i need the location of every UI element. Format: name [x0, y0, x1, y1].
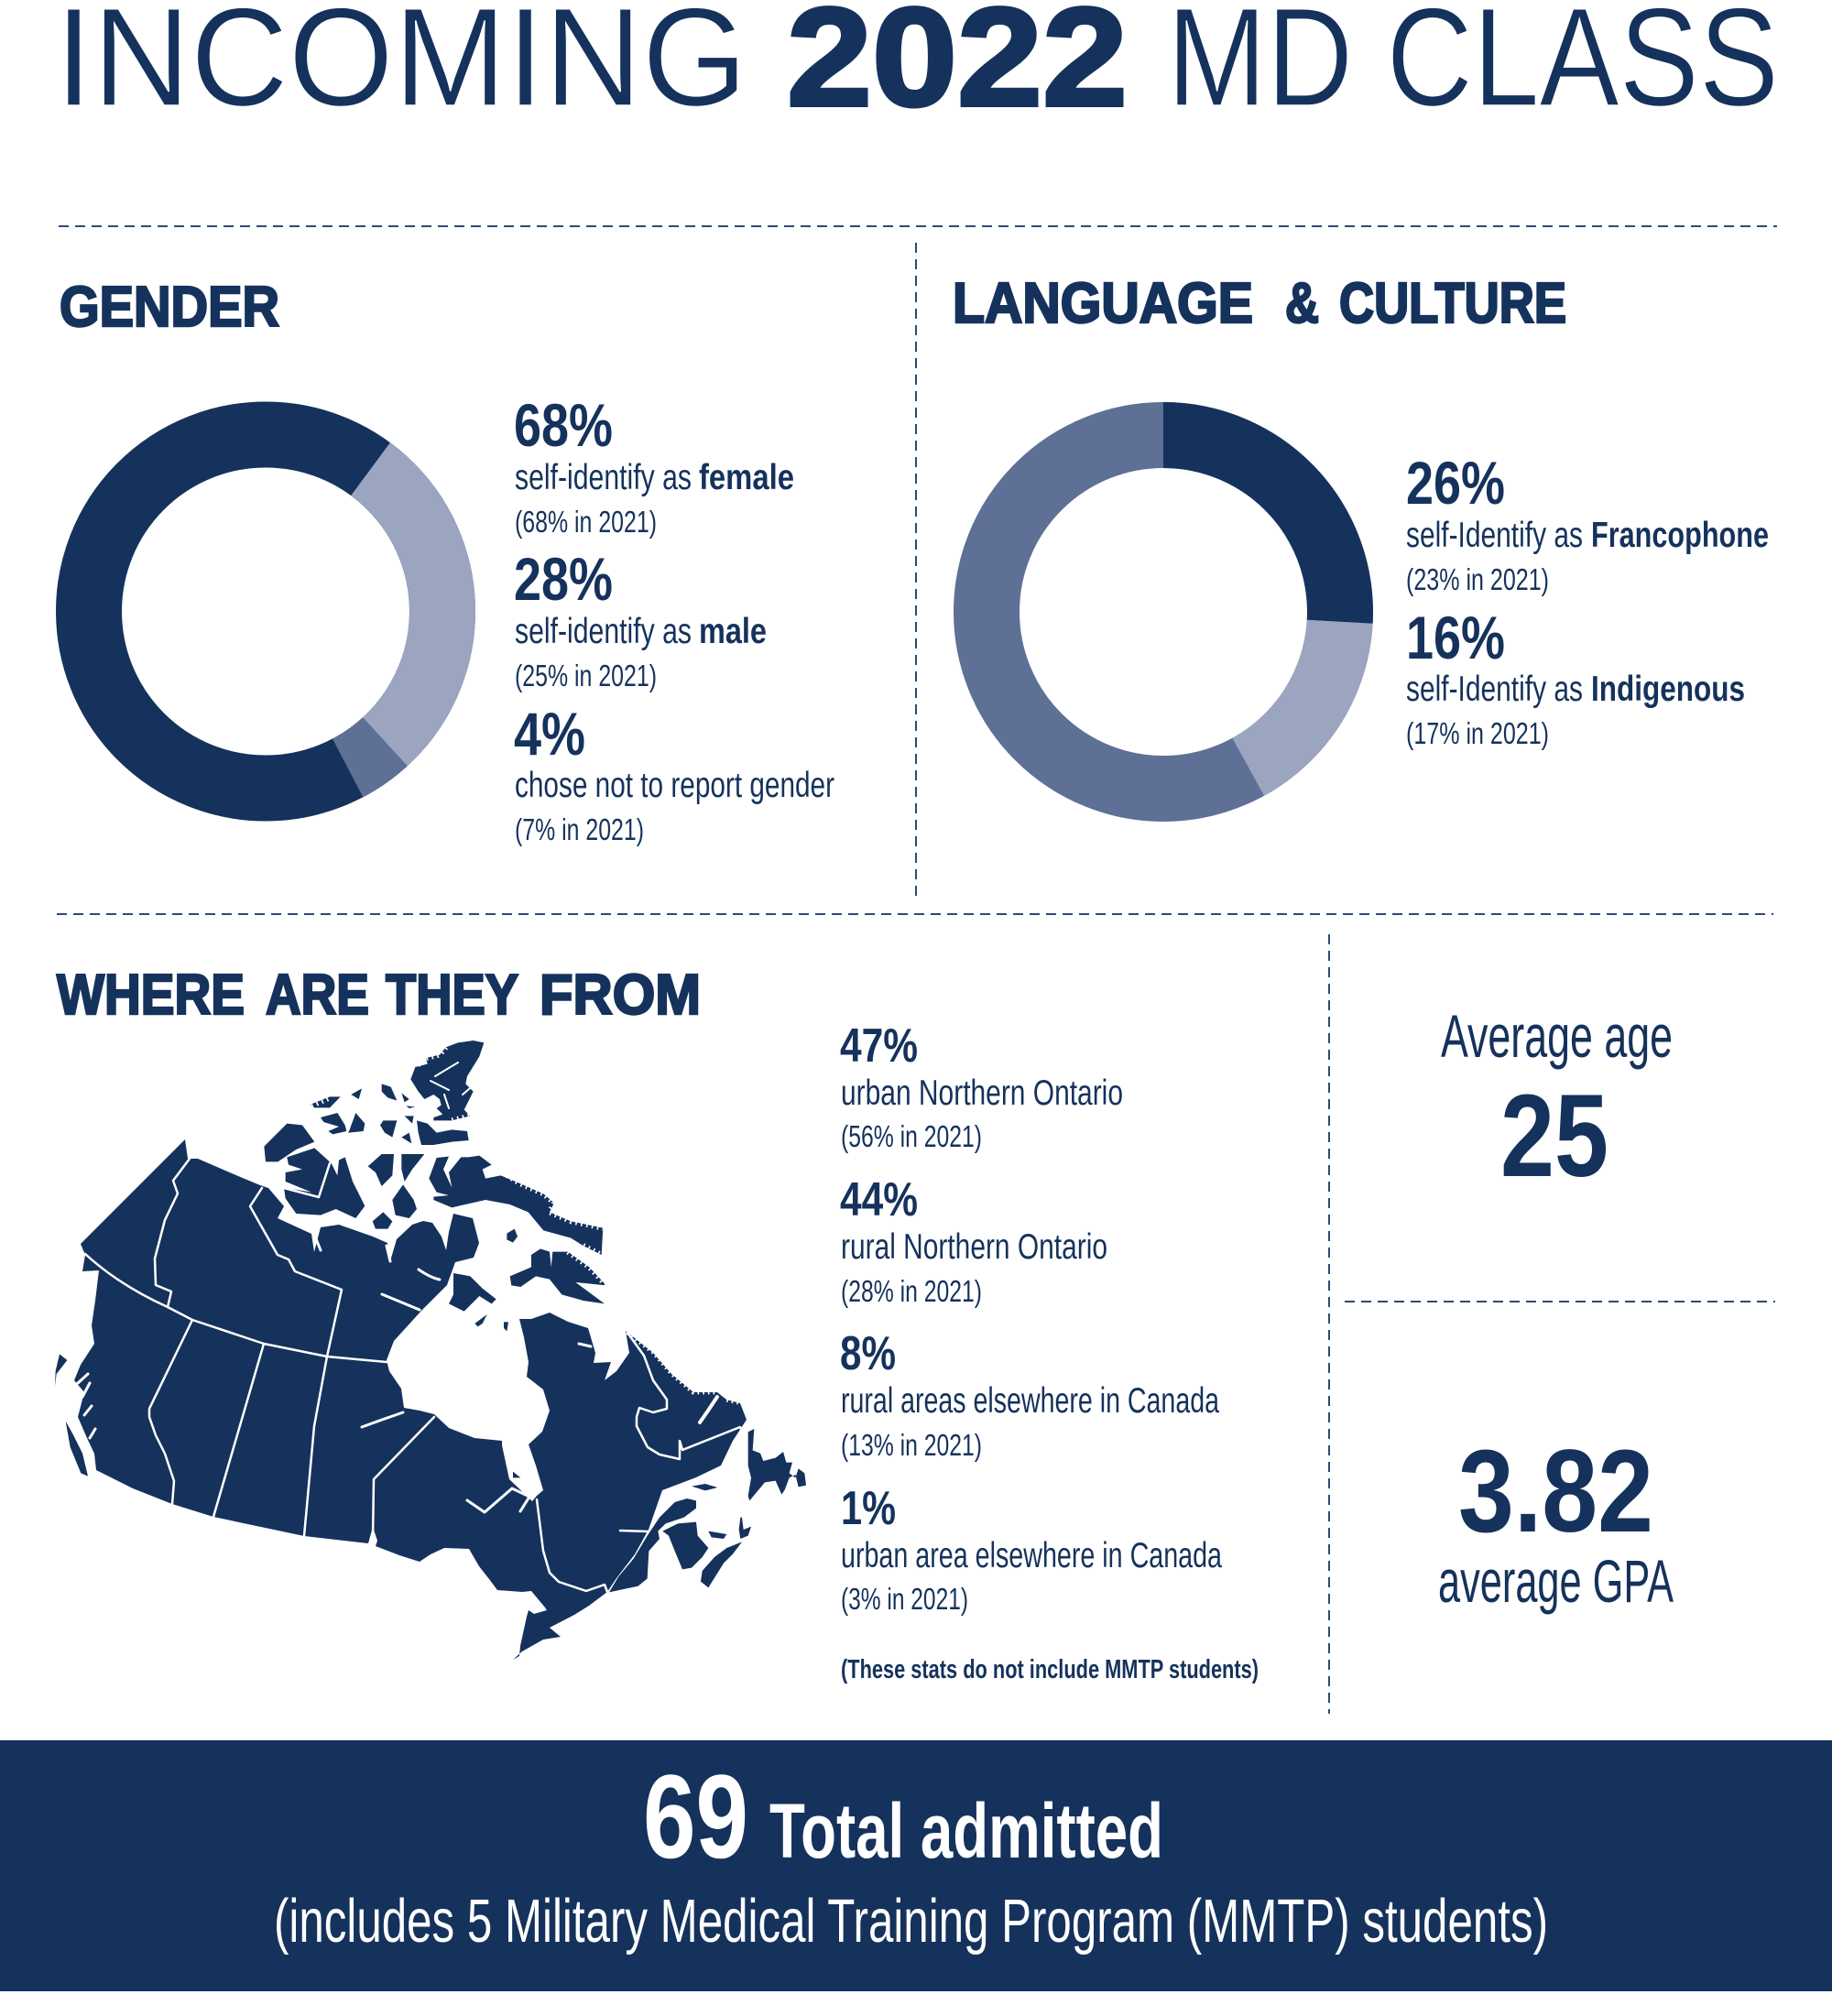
stat: 47% urban Northern Ontario: (56% in 2021) [841, 1119, 982, 1153]
heading: where are they from: ARE [266, 964, 369, 1027]
stat: 68% female: self-identify as [515, 458, 692, 497]
label: average GPA: average GPA [1438, 1547, 1674, 1615]
stat: 44% rural Northern Ontario: 44% [840, 1173, 918, 1226]
stat: 26% Francophone: self-Identify as [1406, 516, 1583, 555]
heading: language and culture [953, 272, 1566, 335]
stat: 4% not reported: (7% in 2021) [515, 812, 644, 846]
label: total admitted: Total admitted [769, 1788, 1163, 1874]
stat: 44% rural Northern Ontario: rural Northern Ontario [841, 1227, 1107, 1267]
stat: 28% male: (25% in 2021) [515, 659, 657, 692]
panel: average GPA [1438, 1426, 1674, 1615]
stat: 26% Francophone: Francophone [1591, 516, 1769, 555]
stat: 28% male [514, 545, 767, 692]
donut chart: language and culture [987, 402, 1373, 796]
stat: 4% not reported [514, 700, 834, 846]
stat: 26% Francophone [1406, 449, 1769, 596]
stat: 1% urban elsewhere [841, 1482, 1222, 1616]
panel: where are they from [55, 964, 1259, 1684]
arctic islands [264, 1041, 606, 1331]
panel: gender [60, 276, 834, 846]
stat: 47% urban Northern Ontario: 47% [840, 1019, 918, 1073]
heading: where are they from: WHERE [57, 964, 245, 1027]
stat: 8% rural elsewhere: (13% in 2021) [841, 1428, 982, 1462]
stat: 8% rural elsewhere: 8% [840, 1327, 896, 1380]
inlets and rivers [78, 1062, 717, 1512]
heading: language and culture: CULTURE [1339, 272, 1566, 335]
stat: 68% female [514, 391, 794, 539]
heading: language and culture: & [1285, 272, 1319, 335]
stat: 8% rural elsewhere [840, 1327, 1219, 1462]
stat: 1% urban elsewhere: 1% [841, 1482, 896, 1535]
footnote: (These stats do not include MMTP students) [841, 1655, 1259, 1684]
stat: 28% male: 28% [514, 545, 613, 613]
stat: 8% rural elsewhere: rural areas elsewhere in Canada [841, 1381, 1219, 1421]
stat: 1% urban elsewhere: urban area elsewhere in Canada [841, 1536, 1222, 1575]
stat: 26% Francophone: (23% in 2021) [1406, 562, 1549, 596]
stat: 4% not reported: chose not to report gender [515, 766, 834, 805]
stat: 16% Indigenous: 16% [1406, 604, 1505, 671]
stat: 4% not reported: 4% [514, 700, 585, 768]
heading: gender: GENDER [60, 276, 279, 339]
stat: 47% urban Northern Ontario: urban Northern Ontario [841, 1073, 1123, 1113]
heading: where are they from: FROM [540, 964, 701, 1027]
heading: language and culture: LANGUAGE [953, 272, 1253, 335]
atlantic provinces [513, 1333, 806, 1592]
stat: 28% male: male [699, 612, 767, 651]
value: 25: 25 [1500, 1071, 1608, 1202]
stat: 68% female: female [699, 458, 794, 497]
provincial borders [85, 1159, 742, 1592]
pacific islands [55, 1354, 88, 1477]
stat: 68% female: 68% [514, 391, 613, 459]
label: average age: Average age [1441, 1002, 1673, 1070]
stat: 47% urban Northern Ontario [840, 1019, 1123, 1153]
stat: 1% urban elsewhere: (3% in 2021) [841, 1582, 968, 1616]
value: 69: 69 [643, 1749, 748, 1883]
stat: 16% Indigenous [1406, 604, 1745, 750]
value: 3.82: 3.82 [1458, 1426, 1653, 1557]
stat: 68% female: (68% in 2021) [515, 505, 657, 539]
stat: 16% Indigenous: (17% in 2021) [1406, 716, 1549, 750]
stat: 44% rural Northern Ontario: (28% in 2021) [841, 1274, 982, 1308]
title [55, 0, 1779, 136]
stat: 44% rural Northern Ontario [840, 1173, 1107, 1308]
panel: average age [1441, 1002, 1673, 1202]
stat: 28% male: self-identify as [515, 612, 692, 651]
stat: 16% Indigenous: Indigenous [1591, 670, 1745, 709]
map: Canada [55, 1041, 806, 1660]
stat: 26% Francophone: 26% [1406, 449, 1505, 517]
heading: where are they from: THEY [386, 964, 518, 1027]
stat: 16% Indigenous: self-Identify as [1406, 670, 1583, 709]
banner: total admitted [0, 1740, 1832, 1991]
donut chart: gender [89, 434, 475, 797]
heading: where are they from [57, 964, 701, 1027]
panel: language and culture [953, 272, 1769, 796]
